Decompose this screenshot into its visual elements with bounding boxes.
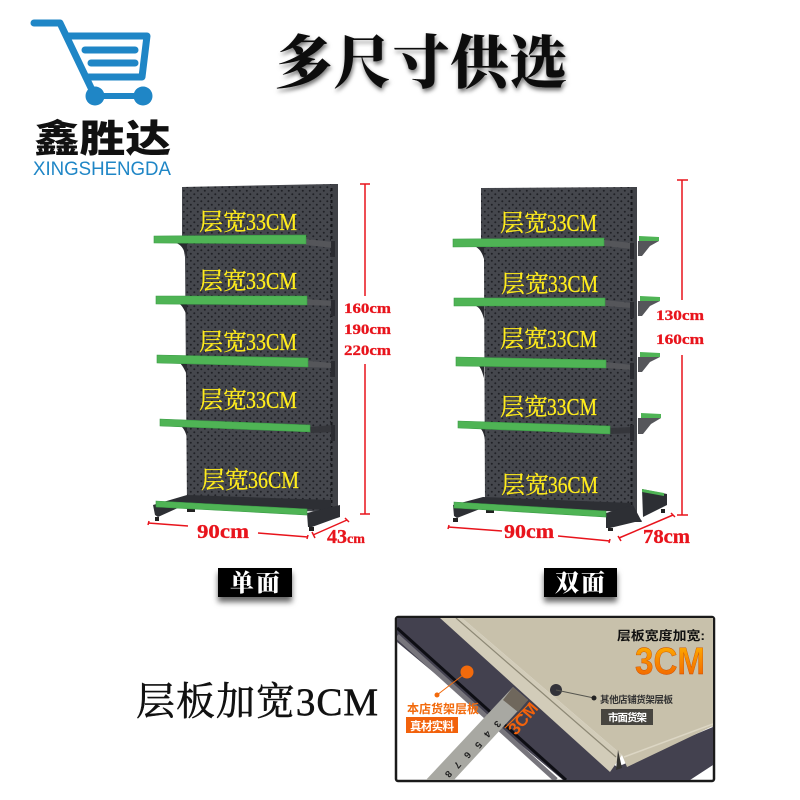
measurement: 3CM on tape: 3CM <box>505 699 542 739</box>
measuring tape: 3 <box>491 718 503 729</box>
pegboard back panel <box>182 184 338 517</box>
shelf width labels: 层宽 <box>199 329 247 356</box>
shelf width labels: 层宽 <box>500 210 548 237</box>
dark shelf beam <box>397 618 713 780</box>
callout: other shops' shelf <box>550 684 673 725</box>
badge: single-sided: 单面 <box>230 563 280 598</box>
shelf width labels: 层宽 <box>501 472 549 499</box>
green shelves <box>154 235 310 515</box>
shelf width labels: 层宽 <box>199 268 247 295</box>
shelf width labels: 33CM <box>246 330 297 356</box>
shelf width labels: 层宽 <box>201 467 249 494</box>
shelf width labels: 33CM <box>547 211 597 237</box>
pegboard back panel <box>481 187 642 521</box>
shelf width labels <box>500 210 598 499</box>
green shelves <box>453 238 610 517</box>
badge: single-sided <box>218 563 292 598</box>
shelf brackets <box>176 239 335 441</box>
shelf width labels: 层宽 <box>199 209 247 236</box>
plate lip <box>440 618 622 772</box>
panel: single-sided shelf <box>148 184 392 548</box>
measuring tape: 6 <box>461 749 473 760</box>
callout: this store's shelf <box>406 666 479 733</box>
shelf width labels: 33CM <box>547 327 597 353</box>
depth dimension: 43cm <box>327 526 365 548</box>
measuring tape <box>425 687 528 781</box>
width dimension: 90cm <box>197 521 249 543</box>
depth dimension <box>312 518 365 548</box>
shelf width labels: 层宽 <box>500 394 548 421</box>
width dimension: 90cm <box>504 521 554 543</box>
measuring tape: 4 <box>481 728 493 740</box>
shelf width labels: 33CM <box>246 210 297 236</box>
height dimension: 190cm <box>344 322 392 338</box>
logo <box>33 23 171 180</box>
headline: widened 3CM: 3CM <box>635 641 705 683</box>
badge: double-sided: 双面 <box>555 563 605 598</box>
headline: widened 3CM: 层板宽度加宽: <box>617 628 705 643</box>
icon: shopping cart <box>34 23 152 106</box>
heading: shelf widened 3CM: 层板加宽3CM <box>136 681 378 724</box>
callout: this store's shelf: 本店货架层板 <box>407 701 479 716</box>
depth dimension <box>618 513 690 548</box>
shelf width labels: 33CM <box>548 272 598 298</box>
shelf width labels: 36CM <box>548 473 598 499</box>
badge: double-sided <box>544 563 617 598</box>
headline: widened 3CM <box>617 628 705 683</box>
shelf width labels: 层宽 <box>501 271 549 298</box>
shelf width labels: 36CM <box>248 468 299 494</box>
base unit <box>453 497 665 531</box>
shelf width labels <box>199 209 299 494</box>
height dimension: 130cm <box>656 308 705 324</box>
beige shelf plate <box>462 618 713 767</box>
width dimension <box>148 521 308 543</box>
shelf width labels: 33CM <box>246 388 297 414</box>
panel: double-sided shelf <box>448 180 705 548</box>
callout: other shops' shelf: 市面货架 <box>608 711 648 724</box>
height dimension <box>656 180 705 515</box>
title: 多尺寸供选 <box>275 16 567 100</box>
height dimension: 160cm <box>656 332 705 348</box>
measuring tape: 8 <box>442 768 454 779</box>
shelf width labels: 层宽 <box>500 326 548 353</box>
shelf brackets <box>474 240 634 441</box>
shelf width labels: 33CM <box>547 395 597 421</box>
logo chinese name: 鑫胜达 <box>34 108 171 163</box>
height dimension: 160cm <box>344 301 392 317</box>
measuring tape: 5 <box>472 739 484 751</box>
callout: this store's shelf: 真材实料 <box>410 719 454 733</box>
rear shelves <box>638 236 667 517</box>
measuring tape: 7 <box>451 759 463 770</box>
width dimension <box>448 521 610 543</box>
callout: other shops' shelf: 其他店铺货架层板 <box>600 694 673 706</box>
depth dimension: 78cm <box>643 526 690 548</box>
logo latin name: XINGSHENGDA <box>33 158 171 180</box>
height dimension <box>344 184 392 514</box>
base unit <box>153 495 340 531</box>
height dimension: 220cm <box>344 343 392 359</box>
photo: shelf edge comparison <box>396 617 714 781</box>
shelf width labels: 层宽 <box>199 387 247 414</box>
shelf width labels: 33CM <box>246 269 297 295</box>
